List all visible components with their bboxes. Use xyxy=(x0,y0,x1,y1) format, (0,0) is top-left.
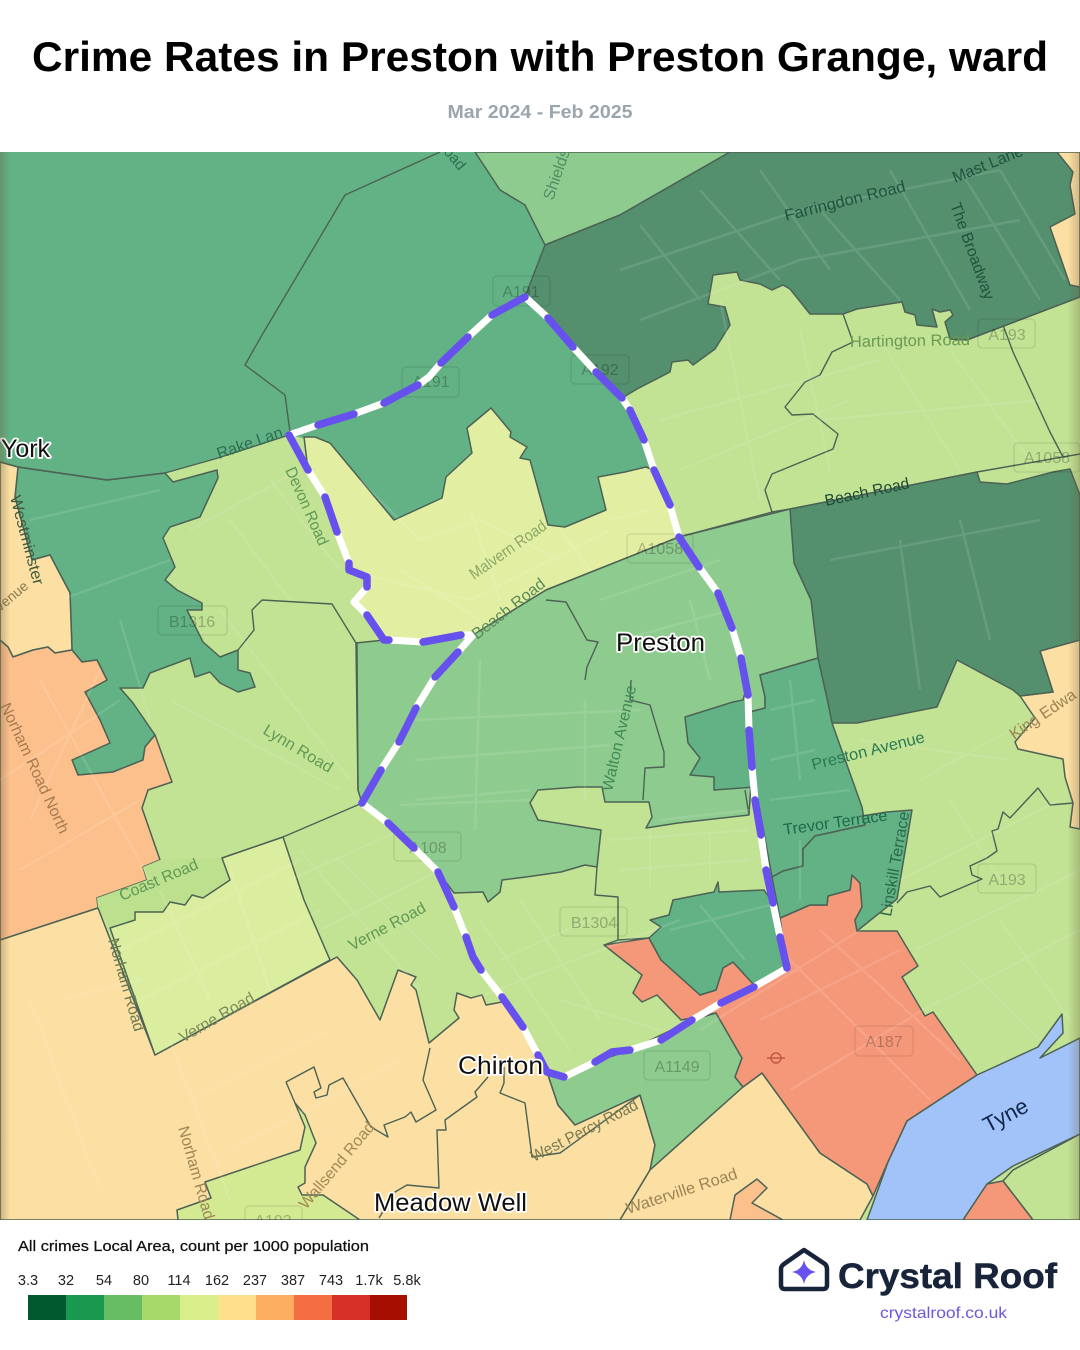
ward boundary: white dashed route xyxy=(289,297,787,1077)
area: west green xyxy=(15,467,255,775)
label: Verne Road west: Verne Road xyxy=(176,990,258,1046)
badge: A193 north: A193 xyxy=(988,327,1026,344)
base pale green area xyxy=(100,272,1080,1220)
label: Beach Road: Beach Road xyxy=(469,576,549,643)
label: Waterville Road: Waterville Road xyxy=(624,1166,740,1218)
badge: A1058 east: A1058 xyxy=(1024,450,1070,467)
street labels xyxy=(0,143,1080,1221)
label: Verne Road: Verne Road xyxy=(346,900,429,955)
label: Road: oad xyxy=(440,144,469,174)
badge: A187: A187 xyxy=(865,1034,903,1051)
area: ward centre green xyxy=(356,537,752,902)
label: Devon Road: Devon Road xyxy=(281,465,331,548)
route white base xyxy=(289,297,787,1077)
area: north-east dark green xyxy=(525,152,1080,398)
ward inner lines xyxy=(357,600,749,945)
legend scale labels: 1.7k xyxy=(355,1273,383,1289)
area: small salmon south-east xyxy=(963,1181,1033,1220)
badge: B1316: B1316 xyxy=(169,614,215,631)
region boundary lines xyxy=(0,152,1080,1218)
label: Lynn Road: Lynn Road xyxy=(260,722,336,777)
legend scale labels: 237 xyxy=(243,1273,267,1289)
area: Coast Road strip xyxy=(97,860,161,908)
badge: A191 top xyxy=(493,276,550,306)
wordmark: Crystal Roof xyxy=(838,1257,1057,1296)
badge: A1058: A1058 xyxy=(637,541,683,558)
legend title: All crimes Local Area, count per 1000 population xyxy=(18,1239,369,1255)
area: small orange xyxy=(730,1179,783,1220)
badge: B1304 xyxy=(560,907,627,936)
place: Chirton: Chirton xyxy=(458,1052,543,1080)
place labels xyxy=(1,435,705,1217)
area: Preston east mid green xyxy=(679,509,818,712)
area: north-east peach xyxy=(1015,640,1080,829)
legend scale labels: 162 xyxy=(205,1273,229,1289)
place: Preston: Preston xyxy=(616,629,705,657)
badge: A193 south xyxy=(245,1206,302,1235)
badge: A191 top: A191 xyxy=(502,284,540,301)
badge: A1149 xyxy=(644,1051,710,1080)
area: top-right peach xyxy=(1050,152,1080,287)
badge: A1108: A108 xyxy=(409,840,447,857)
street network xyxy=(0,170,1080,1200)
label: Hartington Road: Hartington Road xyxy=(850,332,970,351)
area: south-west peach xyxy=(0,908,655,1220)
label: Tyne: Tyne xyxy=(979,1093,1032,1137)
area: south peach xyxy=(620,1073,873,1220)
area: ward south dark-mid green xyxy=(649,882,787,995)
label: Westminster Avenue: Westminster xyxy=(6,494,47,588)
legend scale labels: 743 xyxy=(319,1273,343,1289)
area: north-west green xyxy=(0,152,670,540)
title: Crime Rates in Preston with Preston Grange, ward xyxy=(32,33,1048,80)
badge: A192: A192 xyxy=(581,362,619,379)
route purple dashes xyxy=(289,297,787,1077)
area: south-centre mid green xyxy=(547,1013,743,1170)
label: Norham Road south: Norham Road xyxy=(174,1124,217,1221)
label: Mast Lane: Mast Lane xyxy=(950,143,1026,187)
legend xyxy=(18,1239,421,1320)
badge: A193 north xyxy=(978,319,1035,348)
place: York: York xyxy=(1,435,50,463)
area: Norham block pale yellow xyxy=(110,837,330,1055)
label: Trevor Terrace: Trevor Terrace xyxy=(782,807,889,839)
badge: A1108 xyxy=(394,832,461,861)
place: Meadow Well: Meadow Well xyxy=(374,1189,527,1217)
area: salmon town centre xyxy=(604,875,977,1196)
badge: A191: A191 xyxy=(412,374,450,391)
badge: A187 xyxy=(855,1026,913,1056)
legend scale labels: 387 xyxy=(281,1273,305,1289)
badge: A192 xyxy=(571,355,629,384)
area: top light green xyxy=(475,152,730,245)
label: Coast Road: Coast Road xyxy=(117,856,201,905)
website: crystalroof.co.uk xyxy=(880,1305,1008,1322)
badge: A191 xyxy=(402,367,459,397)
label: Farringdon Road: Farringdon Road xyxy=(783,178,907,225)
area: west orange xyxy=(0,640,172,940)
label: Linskill Terrace: Linskill Terrace xyxy=(878,810,913,918)
label: Norham Road: Norham Road xyxy=(104,936,147,1033)
label: Walton Avenue: Walton Avenue xyxy=(599,684,640,793)
badge: A1058 east xyxy=(1014,443,1080,472)
area: far-west peach xyxy=(0,462,72,657)
badge: A193 east xyxy=(978,864,1036,893)
legend scale labels: 3.3 xyxy=(18,1273,38,1289)
label: Preston Avenue: Preston Avenue xyxy=(810,729,927,774)
area: south-east pale green xyxy=(1003,1134,1080,1220)
label: Shields: Shields xyxy=(541,147,574,202)
brand logo xyxy=(781,1250,1057,1322)
legend scale labels xyxy=(18,1273,421,1289)
legend scale labels: 54 xyxy=(96,1273,112,1289)
legend colour bar xyxy=(28,1295,407,1320)
area: river Tyne xyxy=(867,1014,1080,1220)
legend scale labels: 32 xyxy=(58,1273,74,1289)
label: The Broadway: The Broadway xyxy=(946,201,997,302)
badge: A193 south: A193 xyxy=(254,1213,292,1230)
label: Rake Lane: Rake Lan xyxy=(215,424,285,463)
road badges xyxy=(158,276,1080,1235)
badge: A1058 xyxy=(627,534,693,563)
badge: A1149: A1149 xyxy=(654,1059,700,1076)
subtitle: date range: Mar 2024 - Feb 2025 xyxy=(448,102,632,122)
legend scale labels: 5.8k xyxy=(393,1273,421,1289)
legend scale labels: 114 xyxy=(167,1273,191,1289)
area: south strip pale yellow xyxy=(177,1103,360,1220)
label: West Percy Road: West Percy Road xyxy=(528,1097,641,1166)
badge: B1316 xyxy=(158,606,227,635)
badge: A193 east: A193 xyxy=(988,872,1026,889)
legend scale labels: 80 xyxy=(133,1273,149,1289)
label: Beach Road east: Beach Road xyxy=(823,475,911,510)
icon: house with star xyxy=(781,1250,827,1289)
badge: B1304: B1304 xyxy=(571,915,617,932)
label: Malvern Road: Malvern Road xyxy=(467,518,550,583)
map edge shading xyxy=(0,152,1080,1220)
area: east dark-mid green strip xyxy=(749,658,865,877)
area: ward yellow north xyxy=(304,408,679,642)
icon: metro station xyxy=(767,1053,785,1063)
area: ward inner dark-mid blob xyxy=(685,693,755,790)
area: Linskill green xyxy=(772,810,912,931)
label: King Edward: King Edwa xyxy=(1007,686,1080,743)
area: south-east dark green xyxy=(790,469,1080,723)
label: Wallsend Road: Wallsend Road xyxy=(296,1119,378,1213)
